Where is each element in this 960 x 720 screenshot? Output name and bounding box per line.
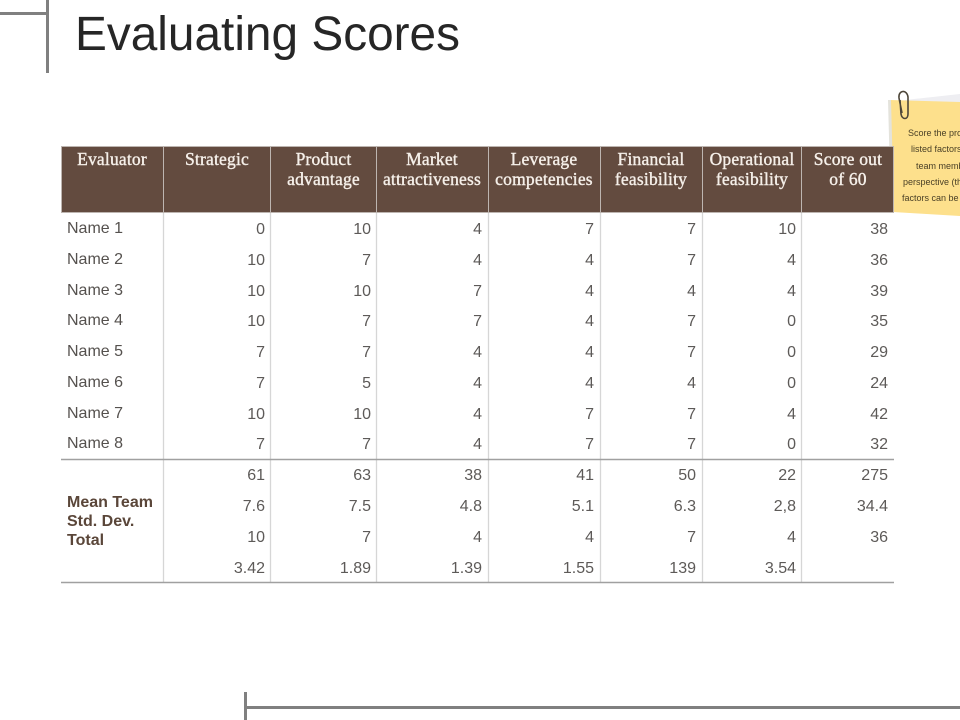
corner bracket top left <box>0 0 49 73</box>
column: product advantage: 7 <box>362 252 371 269</box>
evaluator names <box>67 220 123 452</box>
summary row labels: Mean Team <box>67 494 153 511</box>
column: operational feasibility: 0 <box>787 344 796 361</box>
column: strategic: 0 <box>256 221 265 238</box>
column: market attractiveness: 4 <box>473 436 482 453</box>
summary rules <box>61 460 894 582</box>
column: operational feasibility: 2,8 <box>774 498 796 515</box>
column: operational feasibility: 3.54 <box>765 560 796 577</box>
column: market attractiveness <box>451 221 482 577</box>
column: product advantage <box>340 221 371 577</box>
column: financial feasibility: 7 <box>687 221 696 238</box>
column: product advantage: 7 <box>362 529 371 546</box>
sticky note <box>888 91 960 216</box>
column: leverage competencies: 1.55 <box>563 560 594 577</box>
table header: Strategic <box>185 149 249 169</box>
corner bracket bottom <box>244 692 960 720</box>
column: financial feasibility <box>669 221 696 577</box>
column: leverage competencies: 5.1 <box>572 498 594 515</box>
table header: Financial <box>618 149 684 169</box>
score table <box>61 146 894 582</box>
column: leverage competencies: 41 <box>576 467 594 484</box>
column: market attractiveness: 4 <box>473 375 482 392</box>
column: strategic: 7.6 <box>243 498 265 515</box>
evaluator names: Name 5 <box>67 343 123 360</box>
summary row labels: Total <box>67 532 104 549</box>
table header: Operational <box>710 149 794 169</box>
column: product advantage: 5 <box>362 375 371 392</box>
column: operational feasibility: 0 <box>787 436 796 453</box>
column: market attractiveness: 4 <box>473 252 482 269</box>
column: financial feasibility: 4 <box>687 375 696 392</box>
column: product advantage: 63 <box>353 467 371 484</box>
evaluator names: Name 2 <box>67 251 123 268</box>
column: product advantage: 7.5 <box>349 498 371 515</box>
column: financial feasibility: 7 <box>687 436 696 453</box>
column: strategic: 61 <box>247 467 265 484</box>
column: strategic <box>234 221 265 577</box>
title: Evaluating Scores <box>75 8 460 61</box>
column: strategic: 7 <box>256 436 265 453</box>
table header: Leverage <box>511 149 577 169</box>
column: score out of 60: 36 <box>870 252 888 269</box>
column: operational feasibility: 4 <box>787 283 796 300</box>
column: leverage competencies: 7 <box>585 221 594 238</box>
column: score out of 60 <box>857 221 888 546</box>
column: market attractiveness: 4 <box>473 529 482 546</box>
column: market attractiveness: 7 <box>473 283 482 300</box>
column: strategic: 3.42 <box>234 560 265 577</box>
evaluator names: Name 4 <box>67 312 123 329</box>
column: strategic: 7 <box>256 375 265 392</box>
table header: feasibility <box>716 169 788 189</box>
column: market attractiveness: 1.39 <box>451 560 482 577</box>
column: leverage competencies: 4 <box>585 313 594 330</box>
column: market attractiveness: 38 <box>464 467 482 484</box>
column: leverage competencies: 4 <box>585 375 594 392</box>
column: operational feasibility: 4 <box>787 406 796 423</box>
column: financial feasibility: 7 <box>687 344 696 361</box>
column: score out of 60: 29 <box>870 344 888 361</box>
column: product advantage: 10 <box>353 221 371 238</box>
column: score out of 60: 42 <box>870 406 888 423</box>
column: financial feasibility: 7 <box>687 313 696 330</box>
evaluator names: Name 1 <box>67 220 123 237</box>
column: score out of 60: 24 <box>870 375 888 392</box>
column: leverage competencies: 4 <box>585 252 594 269</box>
column: score out of 60: 39 <box>870 283 888 300</box>
column: operational feasibility: 10 <box>778 221 796 238</box>
table header: Evaluator <box>77 149 147 169</box>
column: leverage competencies: 7 <box>585 436 594 453</box>
column grid lines <box>164 213 802 582</box>
column: score out of 60: 35 <box>870 313 888 330</box>
column: market attractiveness: 4 <box>473 221 482 238</box>
column: financial feasibility: 6.3 <box>674 498 696 515</box>
summary row labels: Std. Dev. <box>67 513 134 530</box>
column: financial feasibility: 7 <box>687 529 696 546</box>
column: product advantage: 7 <box>362 436 371 453</box>
column: product advantage: 10 <box>353 406 371 423</box>
column: financial feasibility: 50 <box>678 467 696 484</box>
icon: paperclip <box>899 91 908 118</box>
column: operational feasibility: 4 <box>787 252 796 269</box>
table header: Market <box>406 149 458 169</box>
table header: of 60 <box>829 169 867 189</box>
column: leverage competencies: 4 <box>585 283 594 300</box>
evaluator names: Name 6 <box>67 374 123 391</box>
column: leverage competencies: 7 <box>585 406 594 423</box>
column: leverage competencies: 4 <box>585 344 594 361</box>
column: market attractiveness: 4 <box>473 406 482 423</box>
column: financial feasibility: 7 <box>687 406 696 423</box>
column: score out of 60: 36 <box>870 529 888 546</box>
evaluator names: Name 3 <box>67 282 123 299</box>
column: strategic: 7 <box>256 344 265 361</box>
table header: Score out <box>814 149 882 169</box>
column: market attractiveness: 4 <box>473 344 482 361</box>
table header: feasibility <box>615 169 687 189</box>
evaluator names: Name 8 <box>67 435 123 452</box>
column: financial feasibility: 4 <box>687 283 696 300</box>
column: financial feasibility: 7 <box>687 252 696 269</box>
column: strategic: 10 <box>247 313 265 330</box>
column: strategic: 10 <box>247 406 265 423</box>
table header: attractiveness <box>383 169 481 189</box>
table header: competencies <box>495 169 593 189</box>
column: score out of 60: 32 <box>870 436 888 453</box>
column: operational feasibility: 0 <box>787 313 796 330</box>
column: score out of 60: 275 <box>861 467 888 484</box>
column: strategic: 10 <box>247 283 265 300</box>
column: leverage competencies: 4 <box>585 529 594 546</box>
column: market attractiveness: 7 <box>473 313 482 330</box>
table header: Product <box>296 149 351 169</box>
column: strategic: 10 <box>247 529 265 546</box>
column: score out of 60: 34.4 <box>857 498 888 515</box>
column: operational feasibility: 4 <box>787 529 796 546</box>
column: score out of 60: 38 <box>870 221 888 238</box>
column: product advantage: 10 <box>353 283 371 300</box>
table header <box>61 146 894 213</box>
summary row labels <box>67 494 153 549</box>
column: leverage competencies <box>563 221 594 577</box>
column: financial feasibility: 139 <box>669 560 696 577</box>
column: product advantage: 7 <box>362 344 371 361</box>
evaluator names: Name 7 <box>67 405 123 422</box>
table header: advantage <box>287 169 360 189</box>
column: strategic: 10 <box>247 252 265 269</box>
column: operational feasibility: 22 <box>778 467 796 484</box>
column: market attractiveness: 4.8 <box>460 498 482 515</box>
column: operational feasibility: 0 <box>787 375 796 392</box>
column: operational feasibility <box>765 221 796 577</box>
column: product advantage: 7 <box>362 313 371 330</box>
column: product advantage: 1.89 <box>340 560 371 577</box>
